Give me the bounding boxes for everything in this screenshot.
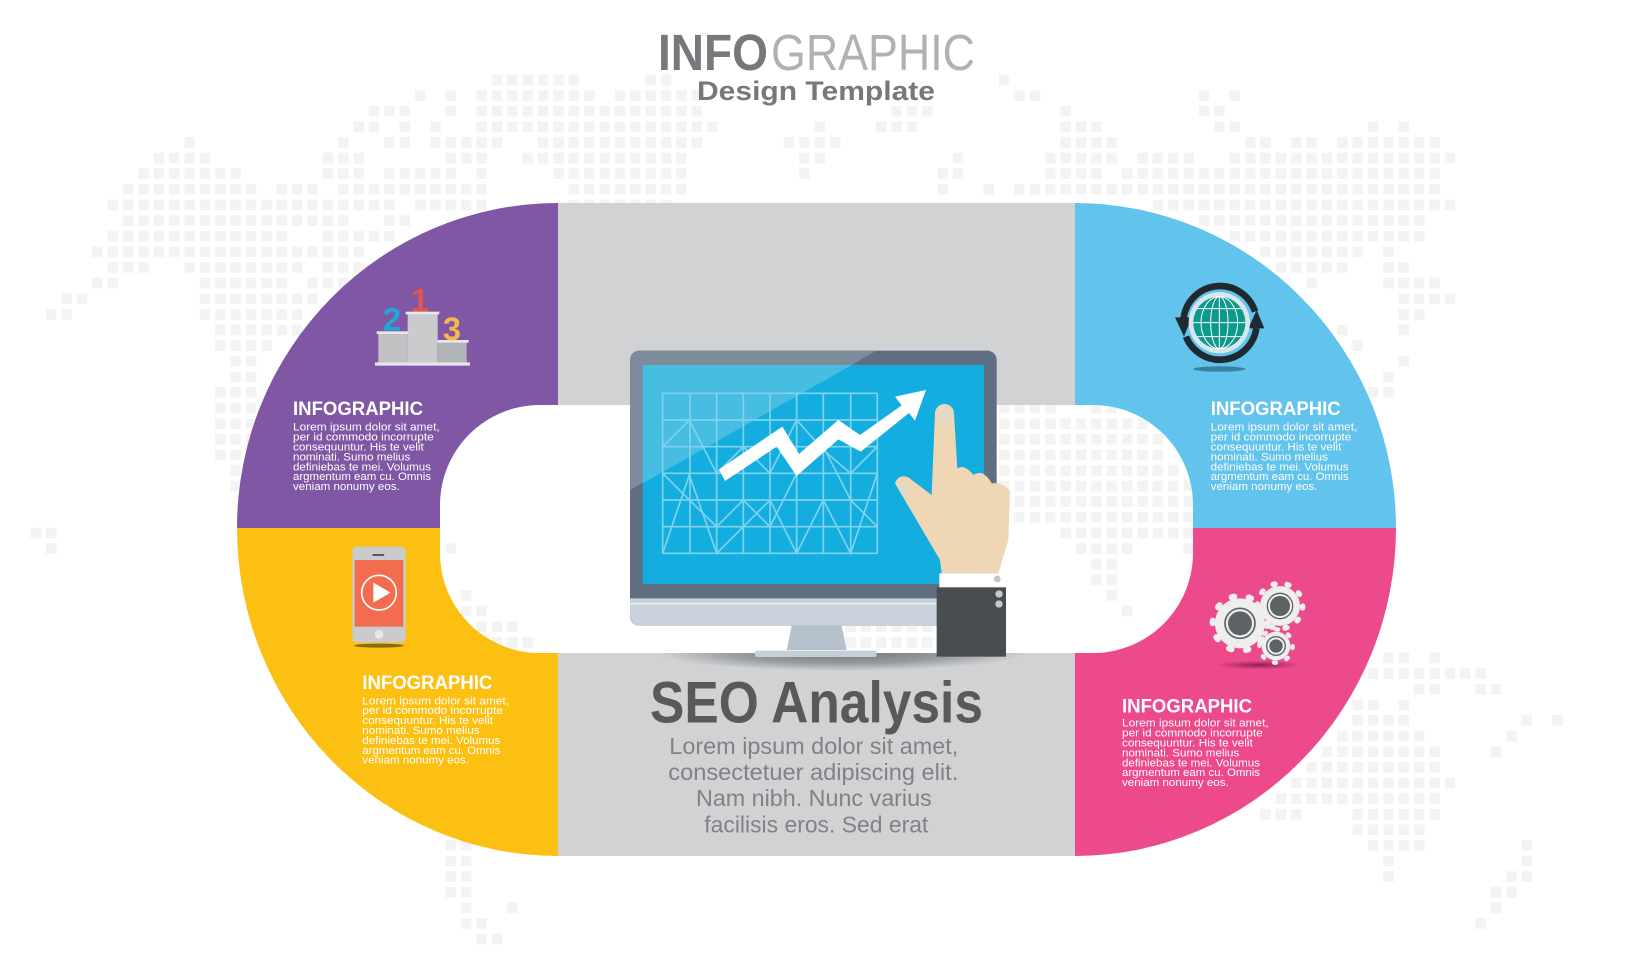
heading (658, 24, 975, 106)
central title: SEO Analysis: SEO Analysis (650, 670, 983, 735)
pointing hand with sleeve (895, 404, 1010, 657)
icon: podium with ranks (375, 282, 470, 366)
panel: pink bottom-right segment (1075, 528, 1396, 856)
text block: pink segment (1122, 718, 1269, 789)
text block: purple segment: argmentum eam cu. Omnis (293, 471, 432, 483)
text block: pink segment: argmentum eam cu. Omnis (1122, 767, 1261, 779)
text block: yellow segment: per id commodo incorrupte (362, 705, 503, 717)
panel: purple top-left segment (237, 203, 558, 528)
text block: purple segment (293, 422, 440, 493)
text block: pink segment: Lorem ipsum dolor sit amet, (1122, 718, 1269, 730)
text block: blue segment: consequuntur. His te velit (1211, 442, 1341, 454)
text block: blue segment: argmentum eam cu. Omnis (1211, 471, 1349, 483)
monitor screen (643, 365, 984, 584)
text block: pink segment: nominati. Sumo melius (1122, 747, 1240, 759)
monitor shadow (669, 653, 1014, 670)
text block: pink segment: veniam nonumy eos. (1122, 777, 1229, 789)
title: blue segment: INFOGRAPHIC (1211, 399, 1341, 420)
text block: pink segment: per id commodo incorrupte (1122, 728, 1263, 740)
heading: Design Template (697, 76, 935, 106)
icon: globe with circular arrows (1175, 286, 1264, 372)
text block: yellow segment: nominati. Sumo melius (362, 725, 480, 737)
title: purple segment: INFOGRAPHIC (293, 399, 423, 420)
text block: blue segment: veniam nonumy eos. (1211, 481, 1317, 493)
text block: purple segment: per id commodo incorrupte (293, 432, 434, 444)
title: yellow segment: INFOGRAPHIC (362, 673, 493, 694)
heading: GRAPHIC (771, 24, 975, 81)
central text block: consectetuer adipiscing elit. (668, 759, 958, 785)
text block: pink segment: consequuntur. His te velit (1122, 738, 1253, 750)
text block: blue segment: per id commodo incorrupte (1211, 432, 1351, 444)
text block: yellow segment: argmentum eam cu. Omnis (362, 745, 501, 757)
text block: blue segment: definiebas te mei. Volumus (1211, 461, 1349, 473)
text block: yellow segment (362, 695, 509, 767)
central text block: Lorem ipsum dolor sit amet, (669, 733, 958, 759)
line chart with grid (663, 393, 877, 553)
icon: podium with ranks: 2 (383, 301, 401, 338)
panel: central grey band (557, 203, 1076, 856)
monitor body (630, 351, 997, 657)
text block: blue segment: nominati. Sumo melius (1211, 451, 1329, 463)
central text block: Nam nibh. Nunc varius (696, 785, 932, 811)
text block: blue segment (1211, 422, 1357, 493)
text block: purple segment: nominati. Sumo melius (293, 451, 411, 463)
text block: purple segment: veniam nonumy eos. (293, 481, 400, 493)
text block: yellow segment: Lorem ipsum dolor sit amet, (362, 695, 509, 707)
central text block: facilisis eros. Sed erat (704, 811, 929, 837)
text block: purple segment: definiebas te mei. Volumus (293, 461, 432, 473)
central text block (668, 733, 958, 837)
arrow: rising trend (719, 390, 926, 481)
panel: yellow bottom-left segment (237, 528, 558, 856)
icon: smartphone with play button (352, 547, 406, 648)
text block: purple segment: consequuntur. His te velit (293, 442, 424, 454)
icon: three gears (1213, 583, 1303, 669)
text block: yellow segment: consequuntur. His te velit (362, 715, 493, 727)
panel: blue top-right segment (1075, 203, 1396, 528)
icon: podium with ranks: 3 (443, 310, 461, 347)
text block: yellow segment: veniam nonumy eos. (362, 755, 469, 767)
title: pink segment: INFOGRAPHIC (1122, 696, 1252, 717)
text block: blue segment: Lorem ipsum dolor sit amet, (1211, 422, 1357, 434)
illustration: computer monitor with chart and pointing hand (630, 351, 1010, 657)
icon: podium with ranks: 1 (411, 282, 429, 319)
text block: purple segment: Lorem ipsum dolor sit amet, (293, 422, 440, 434)
text block: yellow segment: definiebas te mei. Volumus (362, 735, 501, 747)
heading: INFO (658, 24, 768, 81)
text block: pink segment: definiebas te mei. Volumus (1122, 757, 1261, 769)
